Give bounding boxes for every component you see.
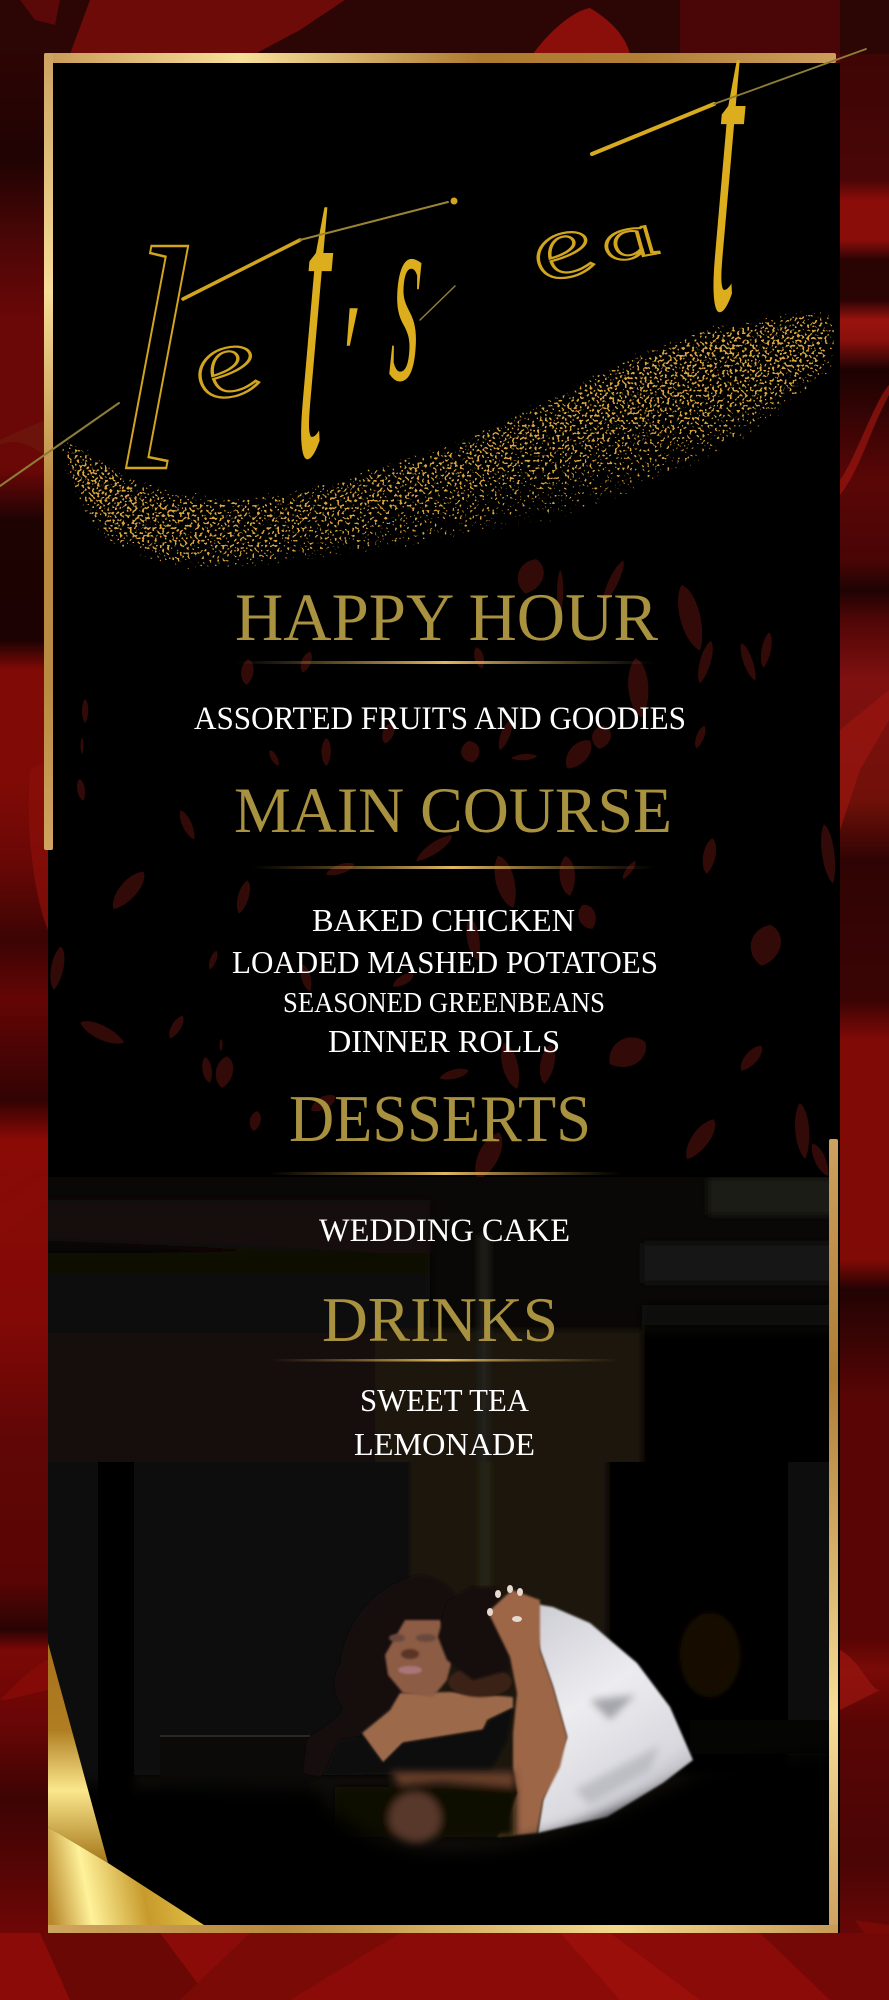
flourish strokes: [0, 49, 866, 486]
foreground black fade: [88, 1754, 829, 1925]
divider: [269, 1359, 621, 1362]
item: loaded mashed potatoes: LOADED MASHED POTATOES: [232, 944, 658, 980]
shirt shadow folds: [575, 1695, 660, 1805]
heading: Drinks: DRINKS: [322, 1285, 558, 1355]
man's head: [438, 1587, 510, 1680]
heading: Happy Hour: HAPPY HOUR: [235, 579, 659, 655]
item: assorted fruits: ASSORTED FRUITS AND GOODIES: [194, 701, 686, 737]
menu text: [194, 579, 686, 1462]
fingertips and ring: [487, 1585, 523, 1622]
let's eat script title: [0, 0, 866, 551]
divider: [269, 1172, 621, 1175]
item: dinner rolls: DINNER ROLLS: [328, 1023, 560, 1059]
left strip petal folds: [0, 420, 48, 1700]
title lettering: ': [332, 270, 360, 448]
scattered rose petals: [47, 555, 839, 1184]
gold glitter wave: [45, 302, 842, 577]
right strip petal folds: [840, 385, 889, 1950]
right bar: [829, 1139, 838, 1933]
item: lemonade: LEMONADE: [354, 1426, 535, 1462]
woman's face: [385, 1620, 452, 1697]
item: wedding cake: WEDDING CAKE: [319, 1213, 570, 1249]
item: baked chicken: BAKED CHICKEN: [312, 902, 575, 938]
man's cheek: [448, 1667, 512, 1697]
lower room: [48, 1462, 829, 1850]
divider: [252, 866, 655, 869]
heading: Desserts: DESSERTS: [289, 1082, 591, 1156]
title lettering: e: [174, 295, 283, 423]
title lettering: l: [109, 184, 197, 538]
title lettering: e: [516, 186, 616, 301]
upper fold: [48, 1643, 108, 1863]
title lettering: a: [592, 192, 673, 274]
eyelids, nose and lips: [389, 1634, 436, 1674]
woman's arm and hand: [488, 1590, 567, 1837]
woman's dress: [323, 1708, 513, 1775]
left bar: [44, 53, 53, 850]
item: seasoned greenbeans: SEASONED GREENBEANS: [283, 987, 605, 1019]
top petal band: [0, 0, 889, 54]
couple figures: [303, 1575, 693, 1844]
bottom bar: [48, 1925, 838, 1933]
bottom petal band: [0, 1933, 889, 2000]
couple photo: [48, 1177, 829, 1850]
divider: [235, 661, 655, 664]
woman's hair: [303, 1575, 457, 1777]
heading: Main Course: MAIN COURSE: [234, 775, 672, 847]
title lettering: s: [385, 153, 429, 435]
man's white shirt: [530, 1603, 693, 1833]
reflection on counter: [335, 1772, 515, 1844]
title lettering: t: [290, 64, 344, 551]
lower fold: [48, 1827, 204, 1925]
woman's chest and neck: [362, 1692, 513, 1763]
top bar: [44, 53, 836, 63]
gold corner ribbon: [48, 1643, 204, 1925]
overlay band with blurred room: [30, 1177, 838, 1473]
item: sweet tea: SWEET TEA: [360, 1382, 529, 1418]
